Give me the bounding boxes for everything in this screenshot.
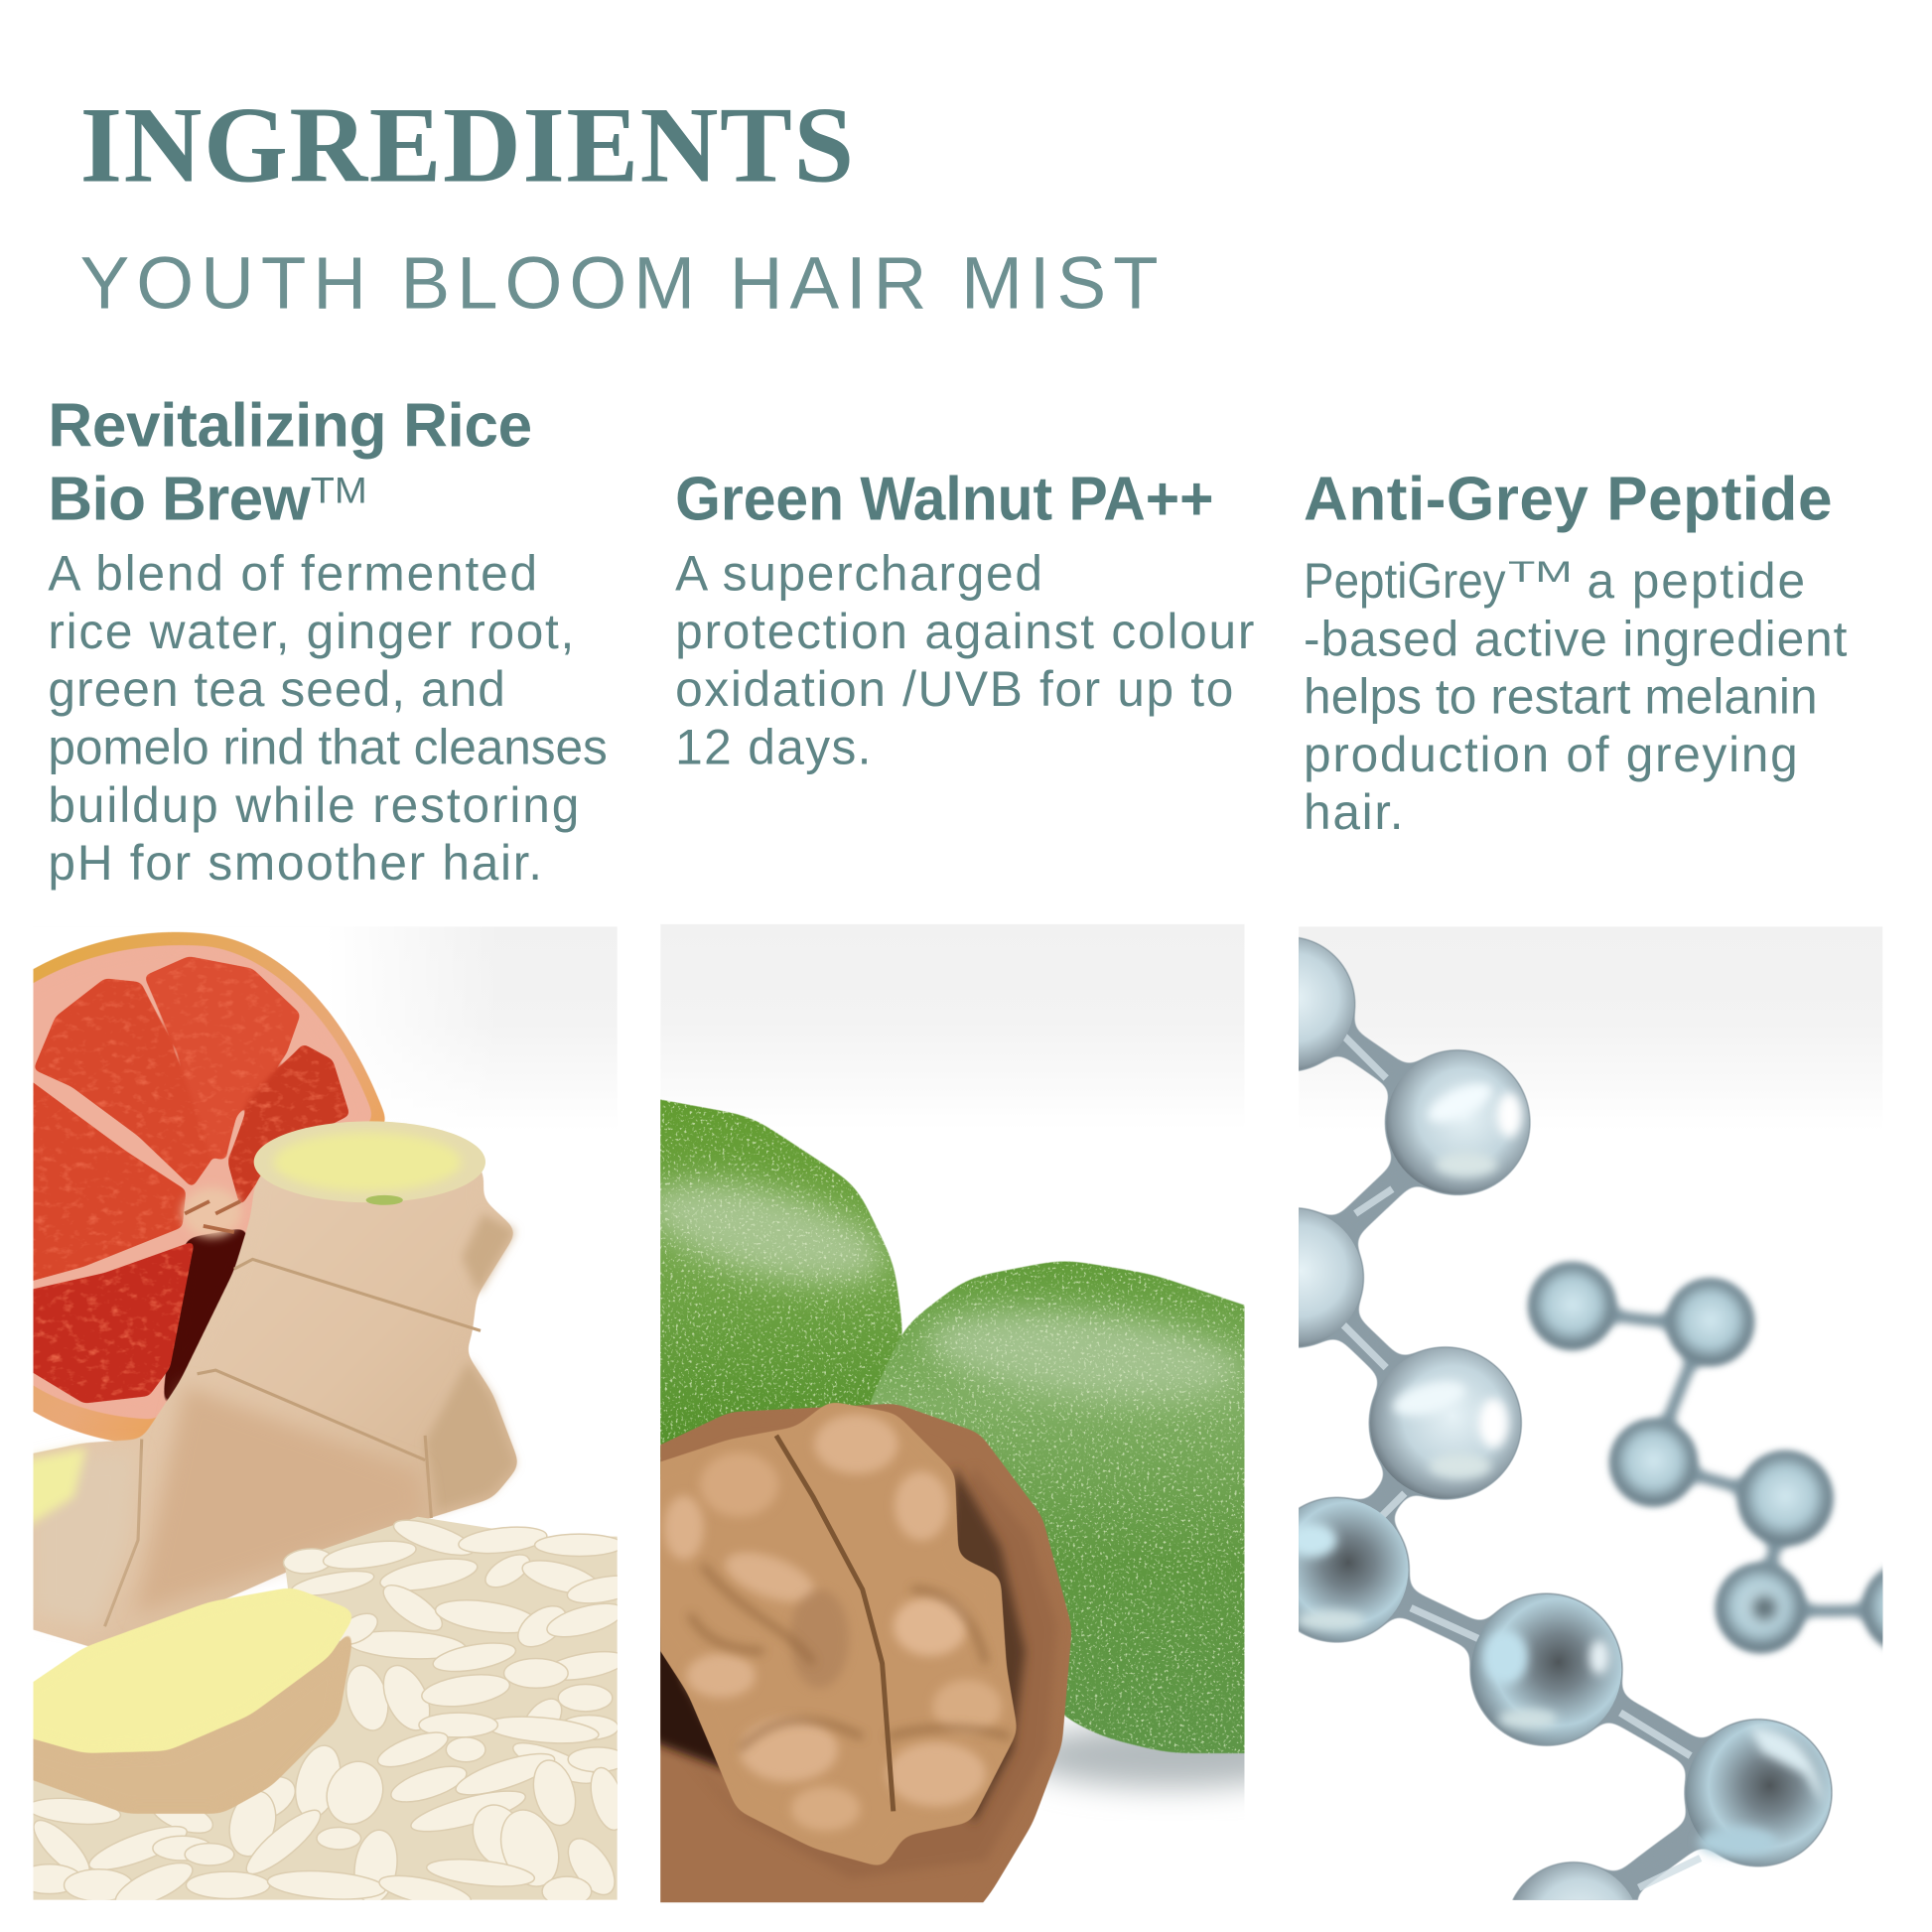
text: peptide description: production of greying <box>1304 727 1798 782</box>
rice pile <box>34 1517 618 1900</box>
text: walnut description <box>675 545 1254 774</box>
shadow under walnuts <box>1023 1724 1318 1788</box>
heading: anti-grey peptide: Anti-Grey Peptide <box>1304 466 1832 534</box>
text: rice description: pH for smoother hair. <box>48 835 542 891</box>
subtitle: YOUTH BLOOM HAIR MIST <box>80 241 1159 324</box>
text: rice description: green tea seed, and <box>48 661 505 717</box>
text: rice description: buildup while restoring <box>48 777 579 833</box>
image panel: molecules <box>1299 927 1882 1900</box>
text: peptide description: PeptiGrey <box>1304 553 1506 609</box>
text: peptide description: helps to restart melanin <box>1304 669 1818 725</box>
text: peptide description: -based active ingredient <box>1304 611 1848 666</box>
green walnut left <box>660 1099 902 1479</box>
text: walnut description: oxidation /UVB for up to <box>675 661 1233 717</box>
title: INGREDIENTS <box>80 84 854 205</box>
heading: rice bio brew: TM <box>311 469 367 510</box>
text: rice description: rice water, ginger root, <box>48 604 574 659</box>
green walnut right <box>870 1261 1245 1753</box>
text: peptide description: TM <box>1508 556 1573 589</box>
ginger root <box>6 1121 520 1650</box>
ginger slice <box>6 1587 357 1814</box>
text: peptide description: hair. <box>1304 784 1404 840</box>
walnut shell <box>660 1404 1072 1902</box>
text: rice description: A blend of fermented <box>48 545 537 601</box>
text: peptide description <box>1304 553 1848 840</box>
image panel: green walnuts <box>660 924 1245 1902</box>
walnut kernel <box>628 1401 1018 1867</box>
text: walnut description: protection against colour <box>675 604 1254 659</box>
heading: rice bio brew: Revitalizing Rice <box>48 391 532 460</box>
text: walnut description: A supercharged <box>675 545 1042 601</box>
heading: green walnut: Green Walnut PA++ <box>675 466 1213 534</box>
text: walnut description: 12 days. <box>675 719 871 774</box>
sharp molecule chain <box>1299 937 1833 1900</box>
image panel: grapefruit, ginger and rice <box>6 926 642 1916</box>
heading: rice bio brew <box>48 391 532 534</box>
grapefruit <box>6 932 388 1447</box>
text: rice description <box>48 545 608 891</box>
text: rice description: pomelo rind that cleanses <box>48 719 608 774</box>
heading: rice bio brew: Bio Brew <box>48 466 311 534</box>
text: peptide description: a peptide <box>1587 553 1805 609</box>
blurred molecule <box>1529 1263 1932 1652</box>
